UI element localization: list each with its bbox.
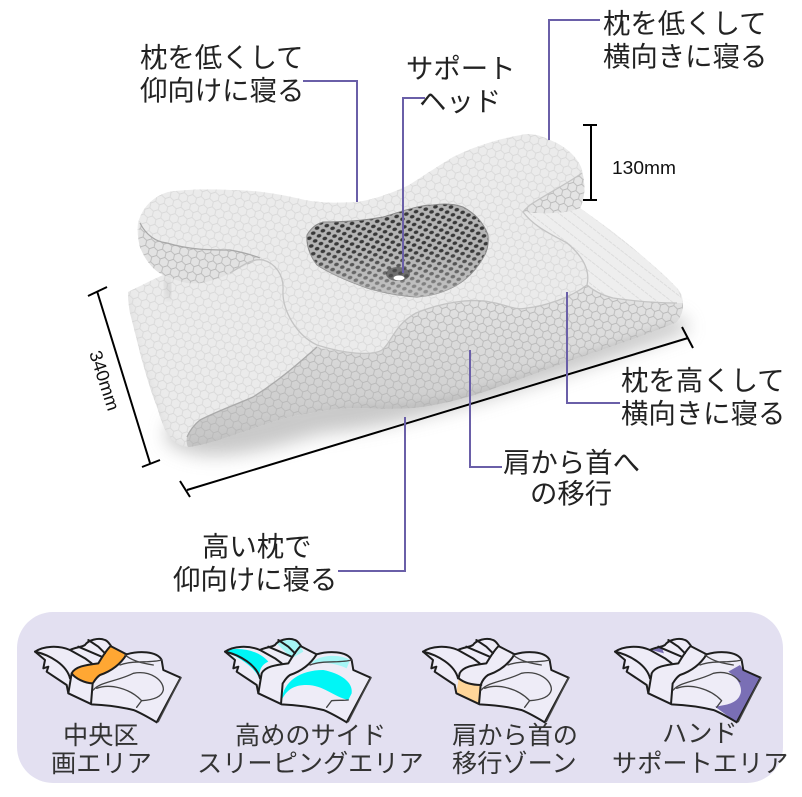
label: hand support area [612, 720, 788, 778]
icon: high side sleeping area [225, 639, 371, 722]
right wedge [523, 208, 683, 303]
dimension: 130mm height [583, 125, 676, 200]
label: low pillow on back [140, 42, 357, 202]
label: low pillow on side [549, 8, 767, 140]
label: high pillow on back: 高い枕で [202, 531, 312, 562]
label: shoulder to neck transition zone: 肩から首の [452, 722, 578, 750]
panel: area legend [17, 612, 783, 783]
label: shoulder to neck transition [470, 350, 640, 509]
label: high pillow on side [567, 292, 785, 429]
base left edge shading [110, 292, 195, 450]
right lobe underside [523, 158, 584, 213]
dimension: 130mm height: 130mm [612, 158, 676, 178]
label: hand support area: サポートエリア [612, 750, 788, 778]
label: hand support area: ハンド [662, 720, 738, 748]
label: high side sleeping area [197, 722, 424, 778]
shadow under pillow [165, 315, 690, 456]
label: shoulder to neck transition zone [452, 722, 578, 778]
seam lines [187, 173, 677, 437]
base bottom shading [336, 322, 672, 409]
label: high pillow on back: 仰向けに寝る [173, 564, 337, 595]
dimension: width line [180, 327, 693, 497]
label: high pillow on side: 枕を高くして [621, 365, 785, 396]
label: shoulder to neck transition zone: 移行ゾーン [452, 750, 577, 778]
icon: shoulder to neck transition zone [423, 639, 569, 722]
front side surface [187, 285, 690, 450]
label: low pillow on back: 仰向けに寝る [140, 75, 304, 106]
label: central area: 中央区 [63, 722, 139, 750]
pillow photo [128, 134, 683, 447]
dimension: 340mm depth: 340mm [85, 348, 123, 413]
label: head support [403, 53, 516, 273]
label: head support: ヘッド [419, 86, 501, 117]
icon: central area [35, 639, 181, 722]
label: low pillow on side: 横向きに寝る [603, 41, 767, 72]
label: low pillow on side: 枕を低くして [603, 8, 767, 39]
dimension: 340mm depth [85, 287, 160, 467]
left lobe [138, 223, 260, 298]
icon: hand support area [615, 639, 765, 725]
label: high pillow on side: 横向きに寝る [621, 398, 785, 429]
label: high side sleeping area: 高めのサイド [235, 722, 386, 750]
light hex on upper surfaces [120, 125, 690, 455]
label: high pillow on back [173, 417, 405, 595]
label: shoulder to neck transition: 肩から首へ [503, 447, 640, 478]
label: central area [51, 722, 152, 778]
label: central area: 画エリア [51, 750, 152, 778]
label: high side sleeping area: スリーピングエリア [197, 750, 424, 778]
mesh head support [307, 204, 488, 297]
label: low pillow on back: 枕を低くして [140, 42, 304, 73]
label: head support: サポート [406, 53, 516, 84]
label: shoulder to neck transition: の移行 [530, 478, 612, 509]
